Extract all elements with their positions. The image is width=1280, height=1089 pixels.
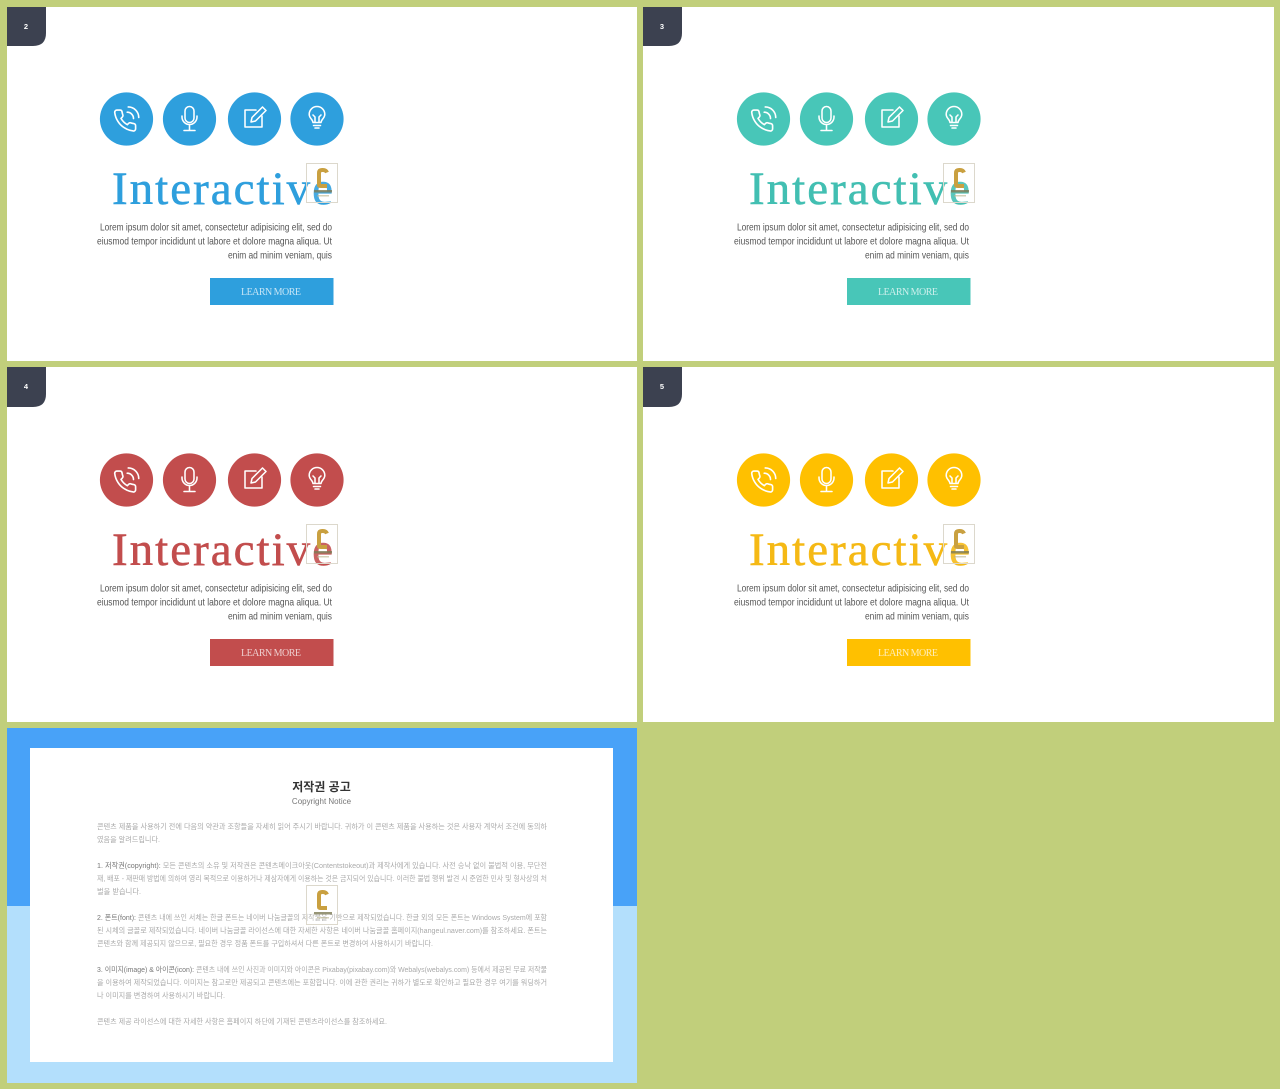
body text bbox=[734, 222, 969, 262]
page tab 2 bbox=[7, 7, 46, 46]
body text bbox=[734, 584, 969, 622]
copyright body text: 2. 폰트(font): 콘텐츠 내에 쓰인 서체는 한글 폰트는 네이버 나눔글꼴의 저작물을 기반으로 제작되었습니다. 한글 외의 모든 폰트는 Windows System에 포함 bbox=[97, 912, 547, 922]
icon: light bulb bbox=[290, 92, 344, 146]
title: Interactive bbox=[112, 163, 333, 215]
page tab 5 bbox=[643, 367, 682, 407]
title: Interactive bbox=[749, 524, 970, 576]
body text: enim ad minim veniam, quis bbox=[865, 612, 969, 622]
icon: phone bbox=[100, 92, 153, 146]
panel: slide 5 yellow bbox=[643, 367, 1274, 722]
page tab 2: 2 bbox=[24, 22, 28, 31]
body text: eiusmod tempor incididunt ut labore et dolore magna aliqua. Ut bbox=[734, 236, 969, 248]
page tab 4: 4 bbox=[24, 382, 29, 391]
body text: eiusmod tempor incididunt ut labore et dolore magna aliqua. Ut bbox=[734, 598, 969, 608]
body text bbox=[97, 584, 332, 622]
page tab 4 bbox=[7, 367, 46, 407]
icon: phone bbox=[737, 92, 790, 146]
icon: edit bbox=[228, 453, 281, 507]
button bbox=[847, 639, 970, 666]
button bbox=[210, 278, 334, 305]
icon: phone bbox=[737, 453, 790, 507]
copyright body text: 벌을 받습니다. bbox=[97, 886, 141, 896]
icon: light bulb bbox=[927, 453, 981, 507]
button: LEARN MORE bbox=[878, 287, 938, 298]
panel: copyright notice slide bbox=[7, 728, 637, 1083]
body text: Lorem ipsum dolor sit amet, consectetur adipisicing elit, sed do bbox=[737, 222, 969, 234]
body text: eiusmod tempor incididunt ut labore et dolore magna aliqua. Ut bbox=[97, 236, 332, 248]
body text: eiusmod tempor incididunt ut labore et dolore magna aliqua. Ut bbox=[97, 598, 332, 608]
icon: light bulb bbox=[927, 92, 981, 146]
copyright heading: 저작권 공고 bbox=[292, 779, 351, 794]
copyright body text: 1. 저작권(copyright): 모든 콘텐츠의 소유 및 저작권은 콘텐츠메이크아웃(Contentstokeout)과 제작사에게 있습니다. 사전 승낙 없이 불법적 이용, 무단전 bbox=[97, 860, 547, 870]
panel: slide 4 red bbox=[7, 367, 637, 722]
copyright body text: 콘텐츠와 함께 제공되지 않으므로, 필요한 경우 정품 폰트를 구입하셔서 다른 폰트로 변경하여 사용하시기 바랍니다. bbox=[97, 938, 433, 948]
copyright subheading: Copyright Notice bbox=[292, 797, 352, 806]
icon: edit bbox=[865, 92, 918, 146]
page tab 5: 5 bbox=[660, 382, 664, 391]
page tab 3: 3 bbox=[660, 22, 664, 31]
copyright body text: 나 이미지를 변경하여 사용하시기 바랍니다. bbox=[97, 990, 225, 1000]
copyright body text: 콘텐츠 제공 라이선스에 대한 자세한 사항은 홈페이지 하단에 기재된 콘텐츠라이선스를 참조하세요. bbox=[97, 1016, 387, 1026]
button: LEARN MORE bbox=[878, 648, 938, 659]
icon: edit bbox=[865, 453, 918, 507]
copyright body text: 된 시체의 글꼴로 제작되었습니다. 네이버 나눔글꼴 라이선스에 대한 자세한 사항은 네이버 나눔글꼴 홈페이지(hangeul.naver.com)를 참조하세요. 폰트는 bbox=[97, 925, 547, 935]
icon: microphone bbox=[163, 92, 216, 146]
button: LEARN MORE bbox=[241, 648, 301, 659]
watermark logo bbox=[944, 164, 974, 202]
body text: Lorem ipsum dolor sit amet, consectetur adipisicing elit, sed do bbox=[100, 222, 332, 234]
icon: microphone bbox=[800, 453, 853, 507]
body text bbox=[97, 222, 332, 262]
icon: microphone bbox=[800, 92, 853, 146]
icon: phone bbox=[100, 453, 153, 507]
body text: enim ad minim veniam, quis bbox=[228, 612, 332, 622]
button: LEARN MORE bbox=[241, 287, 301, 298]
copyright body text: 였음을 알려드립니다. bbox=[97, 834, 160, 844]
copyright body text bbox=[97, 821, 547, 1026]
panel: slide 2 blue bbox=[7, 7, 637, 361]
watermark logo bbox=[306, 164, 338, 202]
button bbox=[210, 639, 334, 666]
copyright body text: 3. 이미지(image) & 아이콘(icon): 콘텐츠 내에 쓰인 사진과 이미지와 아이콘은 Pixabay(pixabay.com)와 Webalys(webalys.com) 등에서 제공된 무료 저작물 bbox=[97, 964, 547, 974]
icon: light bulb bbox=[290, 453, 344, 507]
panel: slide 3 teal bbox=[643, 7, 1274, 361]
watermark logo bbox=[306, 886, 338, 924]
body text: Lorem ipsum dolor sit amet, consectetur adipisicing elit, sed do bbox=[100, 584, 332, 594]
copyright body text: 을 이용하여 제작되었습니다. 이미지는 참고로만 제공되고 콘텐츠에는 포함합니다. 이에 관한 권리는 귀하가 별도로 확인하고 필요한 경우 여기를 워딩하거 bbox=[97, 977, 547, 987]
body text: enim ad minim veniam, quis bbox=[228, 250, 332, 262]
icon: microphone bbox=[163, 453, 216, 507]
watermark logo bbox=[306, 524, 338, 564]
title: Interactive bbox=[749, 163, 970, 215]
copyright body text: 콘텐츠 제품을 사용하기 전에 다음의 약관과 조항들을 자세히 읽어 주시기 바랍니다. 귀하가 이 콘텐츠 제품을 사용하는 것은 사용자 계약서 조건에 동의하 bbox=[97, 821, 547, 831]
icon: edit bbox=[228, 92, 281, 146]
body text: Lorem ipsum dolor sit amet, consectetur adipisicing elit, sed do bbox=[737, 584, 969, 594]
title: Interactive bbox=[112, 524, 333, 576]
page tab 3 bbox=[643, 7, 682, 46]
watermark logo bbox=[944, 524, 974, 564]
copyright body text: 재, 배포 - 재판매 방법에 의하여 영리 목적으로 이용하거나 제삼자에게 이용하는 것은 금지되어 있습니다. 이러한 불법 행위 발견 시 준엄한 민사 및 형사상의 처 bbox=[97, 873, 547, 883]
button bbox=[847, 278, 970, 305]
body text: enim ad minim veniam, quis bbox=[865, 250, 969, 262]
